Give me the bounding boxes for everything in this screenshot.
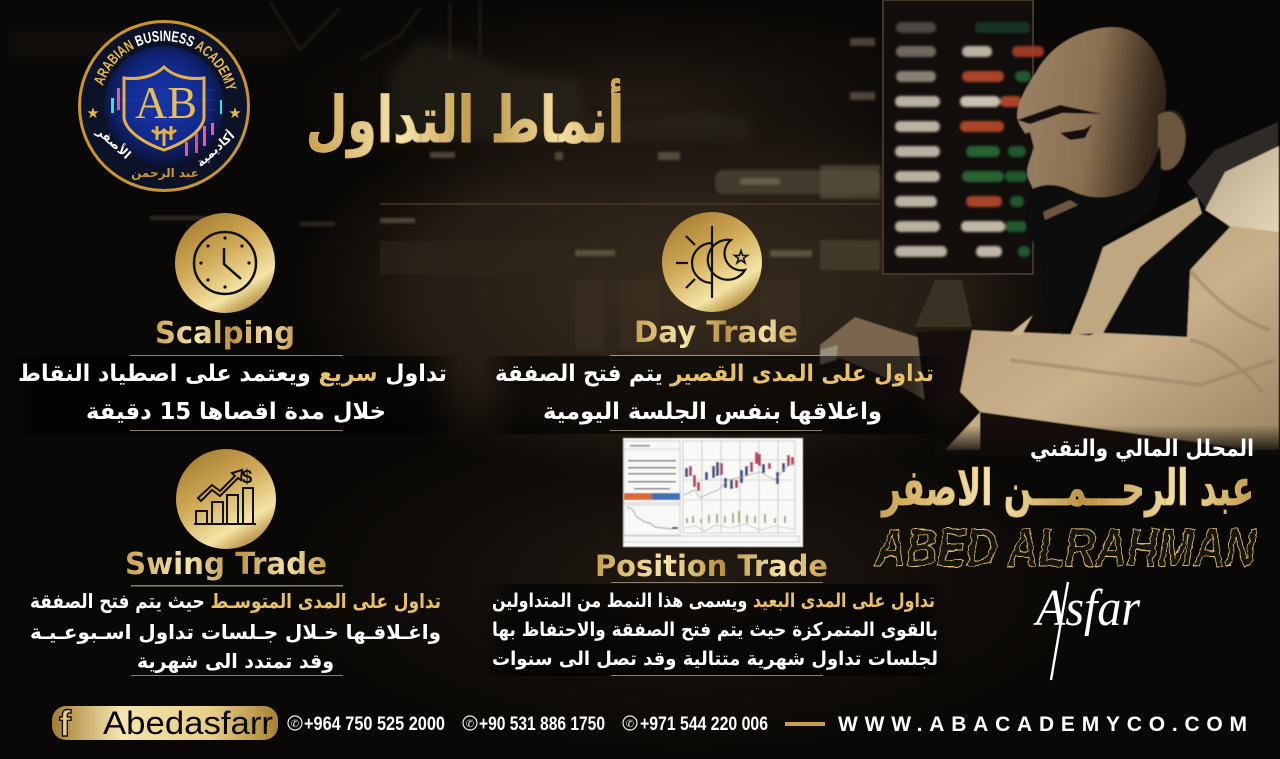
- facebook pill: Abedasfarr: [103, 705, 273, 741]
- market screen behind the analyst: [820, 0, 1044, 327]
- logo: Arabian Business Academy: ★: [228, 104, 242, 122]
- title: أنماط التداول: [306, 78, 624, 158]
- phone 2: ✆: [466, 719, 474, 730]
- body text: [480, 355, 950, 434]
- logo: Arabian Business Academy: أكاديمية: [193, 128, 237, 170]
- body text: خلال مدة اقصاها 15 دقيقة: [86, 399, 386, 425]
- body text: واغـلاقـها خـلال جـلسات تداول اسـبوعـيـة: [30, 620, 441, 644]
- body text: تداول على المدى المتوسـط حيث يتم فتح الصفقة: [30, 589, 441, 613]
- website: WWW.ABACADEMYCO.COM: [838, 713, 1247, 736]
- icon: growth chart: $: [242, 467, 253, 488]
- logo: Arabian Business Academy: AB: [135, 77, 197, 128]
- ghost chart: [10, 30, 750, 140]
- chair: [1187, 122, 1279, 236]
- body text: [478, 582, 953, 676]
- icon: growth chart: [176, 449, 276, 549]
- role: المحلل المالي والتقني: [1030, 436, 1254, 462]
- body text: [0, 355, 460, 434]
- icon: sun and moon: ★: [733, 248, 749, 268]
- head and face: [1017, 27, 1187, 205]
- vest: [1103, 213, 1230, 337]
- shirt and sleeve: [945, 226, 1279, 450]
- ear: [1158, 112, 1185, 170]
- body text: وقد تمتدد الى شهرية: [137, 649, 334, 673]
- body text: بالقوى المتمركزة حيث يتم فتح الصفقة والاحتفاظ بها: [492, 619, 938, 641]
- panel: scalping: [0, 213, 460, 434]
- heading: Scalping: [155, 316, 295, 351]
- panel: position trade: [478, 549, 953, 676]
- signature: Asfar: [1033, 580, 1141, 637]
- facebook pill: f: [59, 703, 72, 744]
- brow and eye: [1017, 105, 1102, 148]
- logo: Arabian Business Academy: ARABIAN BUSINESS ACADEMY: [94, 30, 237, 89]
- chart screenshot: [623, 438, 803, 547]
- panel: swing trade: [30, 449, 441, 676]
- beard: [1026, 145, 1161, 335]
- icon: clock: [175, 213, 275, 313]
- analyst portrait: [820, 27, 1279, 450]
- body text: تداول على المدى القصير يتم فتح الصفقة: [495, 361, 934, 387]
- order panel: [624, 445, 680, 529]
- body text: لجلسات تداول شهرية متتالية وقد تصل الى سنوات: [492, 648, 938, 670]
- logo: Arabian Business Academy: ★: [86, 104, 100, 122]
- logo: Arabian Business Academy: [78, 20, 250, 192]
- body text: تداول على المدى البعيد ويسمى هذا النمط من المتداولين: [492, 590, 935, 612]
- body text: واغلاقها بنفس الجلسة اليومية: [543, 399, 882, 425]
- heading: Swing Trade: [125, 547, 327, 582]
- body text: [30, 585, 441, 676]
- analyst name block: [873, 436, 1257, 680]
- collar: [1070, 197, 1202, 335]
- phone 2: +90 531 886 1750: [479, 714, 605, 735]
- candles: [111, 88, 222, 156]
- heading: Position Trade: [595, 549, 828, 583]
- heading: Day Trade: [634, 315, 798, 349]
- signature: [1033, 580, 1141, 680]
- logo: Arabian Business Academy: عبد الرحمن: [131, 166, 199, 180]
- icon: sun and moon: [662, 212, 762, 312]
- phone 1: +964 750 525 2000: [304, 714, 445, 735]
- platform panels: [380, 203, 880, 205]
- candles: [684, 452, 795, 531]
- phone 1: ✆: [291, 719, 299, 730]
- phone 3: +971 544 220 006: [640, 714, 768, 735]
- facebook pill: [52, 703, 278, 744]
- body text: تداول سريع ويعتمد على اصطياد النقاط: [18, 361, 447, 387]
- phone 3: ✆: [626, 719, 634, 730]
- shield: [124, 67, 204, 150]
- logo: Arabian Business Academy: الأصفر: [93, 123, 134, 162]
- panel: day trade: [480, 212, 950, 434]
- footer contact bar: [52, 703, 1247, 744]
- forearm and hand: [820, 317, 972, 405]
